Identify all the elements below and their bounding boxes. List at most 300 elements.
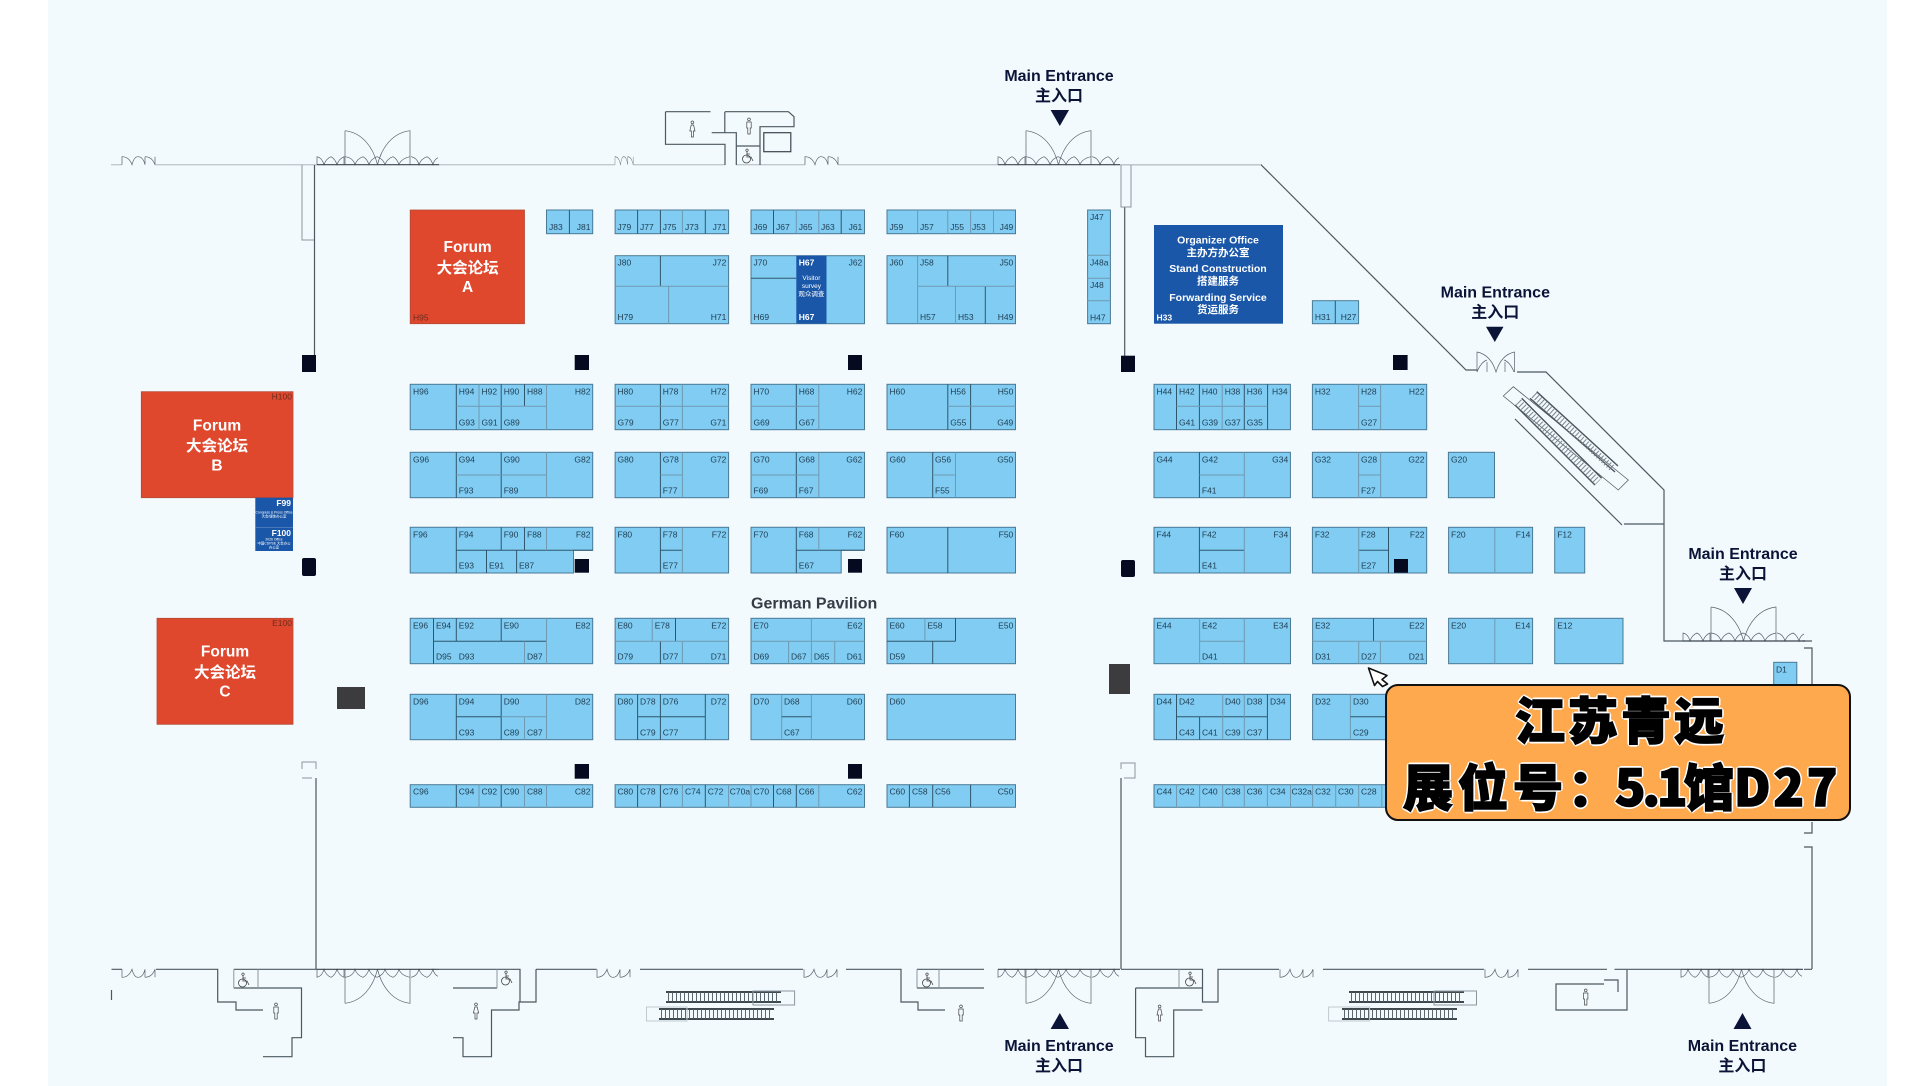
booths: row F block 2: E77 <box>663 561 678 571</box>
pillars in row F <box>575 559 862 573</box>
booths: row F block 3: F68 <box>799 529 814 539</box>
booths: row F block 1: E93 <box>459 561 474 571</box>
booths: H31 H27: H27 <box>1341 312 1357 322</box>
booths: J80 block: H71 <box>711 312 727 322</box>
booths: J69-J61: J63 <box>821 222 835 232</box>
booths: row H block 4: G49 <box>997 417 1014 427</box>
booths: H31 H27 <box>1312 301 1359 324</box>
booths: row F block 4: F60 <box>890 529 904 539</box>
booths: J69-J61 <box>751 210 864 234</box>
booths: row G block 2: G72 <box>710 454 727 464</box>
booths: row C block 4: C32 <box>1315 787 1331 797</box>
booths: row H block 5: H38 <box>1225 386 1241 396</box>
panel: forum C: Forum <box>201 644 249 660</box>
booths: row D block 1: C87 <box>527 727 543 737</box>
booths: row F block 5 <box>1154 527 1290 573</box>
booths: row C block 1 <box>410 785 593 807</box>
booths: row H block 1: G93 <box>459 417 475 427</box>
booths: row E block 3: D61 <box>847 651 863 661</box>
label: main entrance bottom centre <box>1004 1013 1114 1075</box>
panel: forum B: 大会论坛 <box>186 436 248 455</box>
booths: row D block 5: C39 <box>1225 727 1241 737</box>
booths: row D block 5: D42 <box>1179 696 1195 706</box>
booths: row D block 6: C29 <box>1353 727 1369 737</box>
booths: row H block 2: H78 <box>663 386 679 396</box>
booths: row E block 1: E82 <box>575 620 591 630</box>
booths: row D block 3: C67 <box>784 727 800 737</box>
booths: row F block 5: F34 <box>1274 529 1288 539</box>
booths: row H block 2: H72 <box>711 386 727 396</box>
booths: row F block 3 <box>751 527 864 573</box>
booths: row H block 5 <box>1154 384 1290 430</box>
booths: row H block 1: H92 <box>482 386 497 396</box>
booths: row D block 2: D78 <box>640 696 656 706</box>
panel: F99 and F100 offices: 办公室 <box>269 544 280 550</box>
escalators bottom left <box>646 991 795 1021</box>
panel: F99 and F100 offices <box>255 498 293 551</box>
booths: row C block 1: C90 <box>504 787 520 797</box>
panel: F99 and F100 offices: F99 <box>276 498 291 508</box>
booths: J60 block: H53 <box>958 312 974 322</box>
booths: row C block 2: C72 <box>708 787 724 797</box>
booths: row G block 5: G34 <box>1272 454 1288 464</box>
booths: row F block 4: F50 <box>999 529 1014 539</box>
label: main entrance bottom right: 主入口 <box>1718 1056 1766 1075</box>
booths: row G block 1: F89 <box>504 485 519 495</box>
booths: row F block 3: E67 <box>799 561 814 571</box>
booths: J80 block: J80 <box>618 258 631 268</box>
booths: row D block 1: D90 <box>504 696 520 706</box>
panel: organizer office: Forwarding Service <box>1169 292 1267 304</box>
door groups <box>122 131 1805 1003</box>
booths: row E block 2: D77 <box>663 651 679 661</box>
booths: row G block 5: F41 <box>1202 485 1217 495</box>
booths: J59-J49: J55 <box>950 222 964 232</box>
panel: organizer office: 主办方办公室 <box>1186 246 1250 259</box>
booths: row D block 6: D30 <box>1353 696 1369 706</box>
panel: forum A: A <box>462 279 473 296</box>
booths: row H block 5: H42 <box>1179 386 1195 396</box>
booths: J80 block: H79 <box>618 312 633 322</box>
label: main entrance top: 主入口 <box>1035 86 1083 105</box>
booths: row H block 2: H80 <box>618 386 633 396</box>
booths: row F block 1: E91 <box>489 561 504 571</box>
booths: row E block 6 with D27 <box>1313 618 1426 664</box>
booths: row F block 5: F42 <box>1202 529 1217 539</box>
booths: row H block 4: H60 <box>890 386 905 396</box>
booths: H31 H27: H31 <box>1315 312 1331 322</box>
booths: row E block 5: E42 <box>1202 620 1217 630</box>
booths: row E block 1: D87 <box>527 651 543 661</box>
booths: J69-J61: J65 <box>799 222 813 232</box>
escalators bottom right <box>1329 991 1476 1021</box>
panel: organizer office: H33 <box>1156 312 1172 322</box>
booths: row H block 2: G71 <box>710 417 727 427</box>
booths: row C block 4: C38 <box>1225 787 1241 797</box>
booths: row F block 3: F70 <box>754 529 768 539</box>
booths: row G block 6: G28 <box>1361 454 1377 464</box>
booths: row H block 3: G67 <box>799 417 815 427</box>
booths: row F block 5: F44 <box>1156 529 1171 539</box>
booths: row C block 2: C66 <box>799 787 815 797</box>
booths: row C block 3: C56 <box>935 787 951 797</box>
callout: booth number <box>1385 684 1851 821</box>
booths: row G block 1: G82 <box>574 454 591 464</box>
booths: row C block 4: C30 <box>1338 787 1354 797</box>
booths: row F block 1: F96 <box>413 529 428 539</box>
booths: row D block 1: C89 <box>504 727 520 737</box>
panel: forum B: Forum <box>193 418 241 434</box>
booths: row D block 5: D38 <box>1247 696 1263 706</box>
booths: row H block 5: G39 <box>1202 417 1218 427</box>
booths: row G block 2: F77 <box>663 485 678 495</box>
booths: row E block 3: D65 <box>814 651 830 661</box>
booth: E12: E12 <box>1557 620 1573 630</box>
booths: row C block 4: C36 <box>1247 787 1263 797</box>
booths: J47 column: J48a <box>1090 258 1109 268</box>
booths: row G block 1: F93 <box>459 485 474 495</box>
booths: row J: J83 <box>549 222 563 232</box>
booths: row G block 4 <box>887 452 1016 498</box>
booths: row D block 5: C37 <box>1247 727 1263 737</box>
booths: row C block 2: C78 <box>640 787 656 797</box>
booths: row D block 2: D80 <box>618 696 633 706</box>
callout line: booth number: 馆 <box>1684 749 1734 821</box>
lift <box>764 133 791 152</box>
pillars <box>302 355 1408 779</box>
booths: row D block 1: D96 <box>413 696 429 706</box>
booths: row F block 1: F94 <box>459 529 474 539</box>
label: main entrance diagonal <box>1441 284 1550 342</box>
booths: row H block 5: G37 <box>1225 417 1241 427</box>
booths: row H block 6: H32 <box>1315 386 1331 396</box>
panel: F99 and F100 offices: 中国CDPSE 大会办公 <box>258 540 291 546</box>
booths: row E block 3: E70 <box>754 620 769 630</box>
booths: row H block 5: G35 <box>1247 417 1263 427</box>
booths: row G block 3: F67 <box>799 485 814 495</box>
icon: accessible restroom <box>742 149 753 163</box>
booths: row E block 5: D41 <box>1202 651 1218 661</box>
booths: row H block 6 <box>1312 384 1427 430</box>
booths: J70 block with visitor survey: survey <box>802 283 822 290</box>
callout line: booth number <box>1402 749 1840 821</box>
booth: E12 <box>1555 618 1623 664</box>
booths: row G block 6: G32 <box>1315 454 1331 464</box>
bottom restroom icons <box>238 971 1588 1021</box>
booths: J59-J49: J53 <box>972 222 986 232</box>
booths: row C block 2: C74 <box>685 787 701 797</box>
booths: row D block 5: D40 <box>1225 696 1241 706</box>
booths: F20 F14: F20 <box>1451 529 1466 539</box>
booths: row F block 1: F82 <box>576 529 591 539</box>
booths: row E block 2: E72 <box>711 620 727 630</box>
booths: row C block 4: C44 <box>1156 787 1172 797</box>
booths: row G block 2 <box>615 452 729 498</box>
booths: row G block 1 <box>410 452 593 498</box>
booths: row C block 1: C82 <box>575 787 591 797</box>
top restrooms and lift <box>666 112 794 165</box>
booths: J59-J49: J59 <box>890 222 903 232</box>
booths: row E block 6 with D27: D21 <box>1409 651 1425 661</box>
booths: row G block 4: G56 <box>935 454 951 464</box>
panel: F99 and F100 offices: 大会/媒体办公室 <box>262 514 287 518</box>
panel: forum A <box>410 210 524 324</box>
booths: row H block 3 <box>751 384 864 430</box>
label: main entrance top <box>1004 68 1114 126</box>
booths: row E block 4: E58 <box>927 620 943 630</box>
booths: J80 block <box>615 256 729 324</box>
booths: row G block 5 <box>1154 452 1290 498</box>
booths: J79-J71 <box>615 210 729 234</box>
panel: forum C <box>157 618 293 724</box>
panel: F99 and F100 offices: 2026 Office <box>265 538 283 542</box>
booths: row H block 6: H22 <box>1409 386 1425 396</box>
booth: F12: F12 <box>1557 529 1572 539</box>
booths: row D block 6: D32 <box>1315 696 1331 706</box>
callout line: company name: 江苏青远 <box>1515 694 1727 750</box>
booths: J69-J61: J61 <box>849 222 863 232</box>
booths: row H block 1: H82 <box>575 386 591 396</box>
booths: row F block 2: F72 <box>712 529 727 539</box>
booths: row E block 1: E90 <box>504 620 519 630</box>
booths: row C block 1: C88 <box>527 787 543 797</box>
booths: row C block 3 <box>887 785 1016 807</box>
booths: row H block 3: H68 <box>799 386 815 396</box>
booths: J70 block with visitor survey: J62 <box>849 258 863 268</box>
booths: row H block 5: G41 <box>1179 417 1195 427</box>
booths: row G block 3: G62 <box>846 454 863 464</box>
booths: J70 block with visitor survey: J70 <box>754 258 767 268</box>
booths: J69-J61: J67 <box>776 222 790 232</box>
panel: organizer office: 货运服务 <box>1197 303 1239 316</box>
booths: row H block 2: G79 <box>618 417 634 427</box>
booths: row C block 3: C60 <box>890 787 905 797</box>
booths: row D block 2 <box>615 694 729 740</box>
booths: J70 block with visitor survey <box>751 256 864 324</box>
booths: row D block 5: D34 <box>1270 696 1286 706</box>
booths: row G block 5: G42 <box>1202 454 1218 464</box>
booths: J79-J71: J71 <box>713 222 727 232</box>
booths: J69-J61: J69 <box>754 222 767 232</box>
panel: forum B: H100 <box>272 392 292 402</box>
booth: D1: D1 <box>1776 664 1787 674</box>
booths: row C block 2: C76 <box>663 787 679 797</box>
booths: J70 block with visitor survey: H67 <box>799 258 815 268</box>
booths: row G block 5: G44 <box>1156 454 1173 464</box>
booths: row F block 6: E27 <box>1361 561 1376 571</box>
booths: row D block 5: D44 <box>1156 696 1172 706</box>
booths: J47 column: H47 <box>1090 312 1106 322</box>
booths: row H block 4: H50 <box>998 386 1014 396</box>
booths: row G block 1: G94 <box>459 454 475 464</box>
booths: J70 block with visitor survey: H69 <box>754 312 769 322</box>
booths: row E block 1: E94 <box>436 620 451 630</box>
panel: F99 and F100 offices: F100 <box>272 528 291 538</box>
booths: row E block 6 with D27: D31 <box>1315 651 1331 661</box>
booths: row G block 6: G22 <box>1408 454 1425 464</box>
booths: row C block 4: C34 <box>1270 787 1286 797</box>
panel: organizer office <box>1154 225 1283 324</box>
booths: row D block 1: C93 <box>459 727 475 737</box>
booths: row C block 4: C40 <box>1202 787 1218 797</box>
booths: row G block 1: G96 <box>413 454 429 464</box>
label: main entrance bottom right: Main Entrance <box>1688 1038 1797 1055</box>
booths: row F block 2: F78 <box>663 529 678 539</box>
booths: J47 column: J47 <box>1090 212 1104 222</box>
booths: row D block 5 <box>1154 694 1290 740</box>
booths: E20 E14: E20 <box>1451 620 1466 630</box>
booths: J60 block <box>887 256 1016 324</box>
booths: row H block 5: H34 <box>1272 386 1288 396</box>
booths: row E block 1: E92 <box>459 620 474 630</box>
booths: row F block 6 <box>1312 527 1427 573</box>
booths: row E block 2: E80 <box>618 620 633 630</box>
booths: row H block 4 <box>887 384 1016 430</box>
booths: J60 block: H57 <box>920 312 936 322</box>
booths: row D block 2: D76 <box>663 696 679 706</box>
booths: row D block 5: C43 <box>1179 727 1195 737</box>
booths: J59-J49: J57 <box>920 222 934 232</box>
booth: D1 <box>1774 662 1797 692</box>
booths: row G block 4: G60 <box>890 454 906 464</box>
booths: row E block 4 <box>887 618 1016 664</box>
panel: forum C: C <box>219 684 231 700</box>
booths: row C block 3: C50 <box>998 787 1014 797</box>
booth: row D block 4: D60 <box>890 696 905 706</box>
booths: row C block 1: C94 <box>459 787 475 797</box>
label: main entrance right <box>1688 546 1798 604</box>
booths: row F block 2: F80 <box>618 529 632 539</box>
booths: row G block 2: G78 <box>663 454 679 464</box>
booths: row H block 3: G69 <box>754 417 770 427</box>
booths: J79-J71: J77 <box>640 222 654 232</box>
booths: row E block 2: D79 <box>618 651 633 661</box>
booths: row E block 6 with D27: D27 <box>1361 651 1377 661</box>
booths: row C block 4 <box>1154 785 1404 807</box>
booths: row D block 1: D82 <box>575 696 591 706</box>
panel: forum A: H95 <box>413 312 429 322</box>
booths: row C block 2: C70 <box>754 787 769 797</box>
booths: row G block 6 <box>1312 452 1427 498</box>
booths: row E block 1 <box>410 618 593 664</box>
panel: forum B <box>141 392 293 498</box>
icon: women restroom <box>690 121 695 137</box>
booths: row D block 3: D70 <box>754 696 769 706</box>
booths: row E block 6 with D27: E22 <box>1409 620 1425 630</box>
booths: J79-J71: J75 <box>663 222 677 232</box>
panel: forum B: B <box>211 458 223 474</box>
icon: cursor pointing to D27 <box>1368 668 1388 686</box>
booths: row C block 4: C32a <box>1292 787 1312 797</box>
booths: row H block 1 <box>410 384 593 430</box>
booths: row F block 1: E87 <box>519 561 534 571</box>
panel: organizer office: 搭建服务 <box>1197 274 1239 288</box>
booths: row C block 2: C80 <box>618 787 633 797</box>
booths: row G block 3: F69 <box>754 485 768 495</box>
booths: row E block 3: D67 <box>791 651 807 661</box>
booths: row H block 1: H94 <box>459 386 475 396</box>
booths: row C block 2: C62 <box>847 787 863 797</box>
booths: J60 block: J58 <box>920 258 934 268</box>
service blocks <box>337 664 1130 709</box>
booths: row G block 1: G90 <box>504 454 520 464</box>
booths: row D block 3: D60 <box>847 696 863 706</box>
booths: row G block 3 <box>751 452 864 498</box>
booths: row J <box>546 210 593 234</box>
booths: F20 F14 <box>1449 527 1533 573</box>
booths: row E block 1: D95 <box>436 651 452 661</box>
booths: J70 block with visitor survey: 观众调查 <box>798 289 825 298</box>
callout line: booth number: D27 <box>1734 749 1840 821</box>
booths: row F block 6: F28 <box>1361 529 1376 539</box>
callout line: booth number: 5.1 <box>1615 749 1684 821</box>
booths: row D block 3 <box>751 694 864 740</box>
booths: J60 block: J60 <box>890 258 903 268</box>
booths: row C block 4: C42 <box>1179 787 1195 797</box>
icon: men restroom <box>747 118 751 134</box>
booths: row E block 1: D93 <box>459 651 475 661</box>
booth: G20 <box>1448 452 1494 498</box>
label: main entrance right: Main Entrance <box>1688 546 1798 563</box>
booths: row F block 3: F62 <box>848 529 863 539</box>
booths: row H block 2: G77 <box>663 417 679 427</box>
booths: row C block 2: C68 <box>776 787 792 797</box>
panel: F99 and F100 offices: Congress & Press Office <box>255 510 293 514</box>
booths: row E block 2 <box>615 618 729 664</box>
booths: row D block 5: C41 <box>1202 727 1218 737</box>
booths: row H block 1: G89 <box>504 417 520 427</box>
booths: row C block 1: C96 <box>413 787 429 797</box>
booths: F20 F14: F14 <box>1516 529 1531 539</box>
booths: row F block 6: F22 <box>1410 529 1425 539</box>
booths: row D block 1: D94 <box>459 696 475 706</box>
booth: F12 <box>1555 527 1585 573</box>
booths: J47 column: J48 <box>1090 280 1104 290</box>
callout line: booth number: 展位号： <box>1403 749 1623 821</box>
panel: forum A: 大会论坛 <box>437 258 499 277</box>
booths: row E block 3 <box>751 618 864 664</box>
booths: E20 E14: E14 <box>1515 620 1531 630</box>
booths: row H block 1: H88 <box>527 386 543 396</box>
booths: J47 column <box>1088 210 1110 324</box>
booths: J59-J49: J49 <box>1000 222 1014 232</box>
booths: J70 block with visitor survey: H67 <box>799 312 815 322</box>
booths: row G block 2: G80 <box>618 454 634 464</box>
booths: row H block 4: H56 <box>950 386 966 396</box>
booths: row D block 3: D68 <box>784 696 800 706</box>
booths: row H block 5: H44 <box>1156 386 1172 396</box>
booths: row H block 3: H70 <box>754 386 769 396</box>
booths: row E block 1: E96 <box>413 620 428 630</box>
booths: J60 block: J50 <box>1000 258 1014 268</box>
booths: row E block 3: E62 <box>847 620 863 630</box>
booths: row H block 1: G91 <box>482 417 498 427</box>
booths: row H block 1: H90 <box>504 386 520 396</box>
booths: row D block 2: C77 <box>663 727 679 737</box>
walls: hall outline <box>111 165 1812 1057</box>
booths: row E block 4: D59 <box>890 651 905 661</box>
booths: row E block 2: D71 <box>711 651 727 661</box>
booths: row D block 1 <box>410 694 593 740</box>
booths: J60 block: H49 <box>998 312 1014 322</box>
booths: J70 block with visitor survey: Visitor <box>802 275 821 282</box>
booths: row F block 1: F88 <box>527 529 542 539</box>
booths: row E block 4: E50 <box>998 620 1014 630</box>
booths: row H block 2 <box>615 384 729 430</box>
booths: row F block 2 <box>615 527 729 573</box>
label: main entrance top: Main Entrance <box>1004 68 1114 85</box>
booths: row E block 6 with D27: E32 <box>1315 620 1330 630</box>
